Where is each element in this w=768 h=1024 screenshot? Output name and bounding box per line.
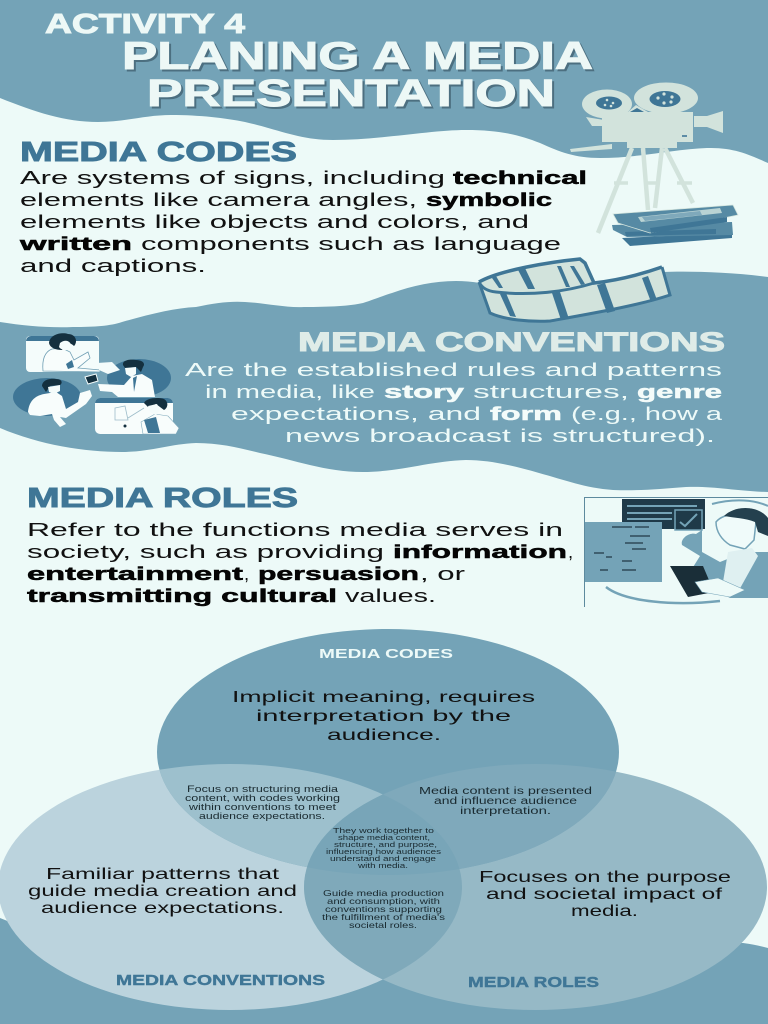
circle: media conventions xyxy=(0,764,462,1010)
text: conventions and roles overlap: conventions supporting xyxy=(325,905,443,914)
text block: media roles description: entertainment xyxy=(27,563,243,584)
section heading: media roles: MEDIA ROLES xyxy=(27,482,298,513)
circle: media codes xyxy=(157,629,619,875)
text block: media codes description: written xyxy=(18,233,132,254)
text block: media conventions description: news broadcast is structured). xyxy=(285,425,715,446)
decorative arc xyxy=(606,587,720,603)
dark checklist window xyxy=(622,499,705,530)
text: conventions and roles overlap: and consumption, with xyxy=(327,897,441,906)
text: media conventions: audience expectations. xyxy=(41,900,284,917)
text block: media conventions description: form xyxy=(490,403,562,424)
text block: media roles description xyxy=(27,519,573,606)
text: codes and conventions overlap xyxy=(185,784,340,821)
text: centre overlap: They work together to xyxy=(333,826,434,835)
text block: media codes description: elements like objects and colors, and xyxy=(20,211,529,232)
illustration: people collaborating xyxy=(13,333,179,434)
label: media roles: MEDIA ROLES xyxy=(468,974,599,991)
woman xyxy=(670,500,768,598)
text: codes and roles overlap xyxy=(419,786,592,817)
text block: media roles description: transmitting cultural xyxy=(27,585,337,606)
text: media codes xyxy=(232,689,535,744)
text: media roles: media. xyxy=(571,903,638,920)
text block: media codes description xyxy=(18,167,587,276)
section heading: media codes: MEDIA CODES xyxy=(20,136,297,167)
overlap: codes and roles xyxy=(384,764,616,868)
text: codes and roles overlap: interpretation. xyxy=(460,806,551,817)
text: codes and conventions overlap: content, with codes working xyxy=(185,793,340,803)
text block: media conventions description: story xyxy=(384,381,465,402)
text: codes and conventions overlap: audience expectations. xyxy=(199,811,325,821)
text: centre overlap: understand and engage xyxy=(330,854,436,863)
text block: media roles description: information xyxy=(393,541,567,562)
label: media codes: MEDIA CODES xyxy=(319,646,453,661)
text: centre overlap: shape media content, xyxy=(338,833,430,842)
video window top xyxy=(26,333,100,372)
text: media codes: interpretation by the xyxy=(256,708,511,725)
activity label: ACTIVITY 4 xyxy=(45,8,246,39)
text block: media conventions description: expectations, and xyxy=(231,403,481,424)
icon: film camera on tripod xyxy=(570,82,723,233)
label: media conventions: MEDIA CONVENTIONS xyxy=(116,972,325,989)
text block: media codes description: elements like camera angles, xyxy=(20,189,417,210)
text: media roles: Focuses on the purpose xyxy=(479,869,731,886)
section heading: media conventions: MEDIA CONVENTIONS xyxy=(298,327,725,357)
text: media roles: and societal impact of xyxy=(486,886,723,903)
text: centre overlap: structure, and purpose, xyxy=(334,840,437,849)
text: conventions and roles overlap: Guide media production xyxy=(323,889,445,898)
video window bottom xyxy=(95,398,179,434)
title: PRESENTATION xyxy=(147,73,555,115)
text: centre overlap xyxy=(326,826,441,870)
text block: media conventions description: structures, xyxy=(473,381,629,402)
text block: media conventions description: in media, like xyxy=(205,381,375,402)
text: media codes: audience. xyxy=(327,727,441,744)
avatar left xyxy=(13,378,92,427)
text: codes and roles overlap: Media content is presented xyxy=(419,786,592,797)
text: conventions and roles overlap xyxy=(322,889,445,930)
title xyxy=(122,35,593,115)
text: centre overlap: influencing how audiences xyxy=(326,847,441,856)
text block: media conventions description: Are the established rules and patterns xyxy=(185,359,722,380)
text: centre overlap: with media. xyxy=(357,861,408,870)
text: media conventions: Familiar patterns that xyxy=(46,866,280,883)
text: media conventions xyxy=(28,866,297,917)
overlap: conventions and roles xyxy=(304,868,462,980)
text block: media codes description: Are systems of signs, including xyxy=(20,167,445,188)
circle: media roles xyxy=(304,764,767,1010)
text block: media codes description: and captions. xyxy=(20,255,206,276)
text: media conventions: guide media creation and xyxy=(28,883,297,900)
text: media roles xyxy=(479,869,731,920)
text block: media roles description: Refer to the functions media serves in xyxy=(27,519,563,540)
text block: media conventions description xyxy=(185,359,723,446)
text: codes and roles overlap: and influence audience xyxy=(434,796,578,807)
text block: media codes description: symbolic xyxy=(426,189,552,210)
text: codes and conventions overlap: Focus on structuring media xyxy=(187,784,339,794)
blue document xyxy=(585,522,662,582)
text: codes and conventions overlap: within conventions to meet xyxy=(188,802,337,812)
text block: media codes description: components such as language xyxy=(141,233,561,254)
text: conventions and roles overlap: the fulfillment of media's xyxy=(322,913,445,922)
text block: media roles description: , xyxy=(568,541,573,562)
venn diagram xyxy=(0,629,767,1010)
text block: media codes description: technical xyxy=(453,167,587,188)
avatar right xyxy=(85,359,171,397)
icon: film strip xyxy=(479,259,670,321)
title: PLANING A MEDIA xyxy=(122,35,593,78)
text: media codes: Implicit meaning, requires xyxy=(232,689,535,706)
overlap: codes and conventions xyxy=(160,764,382,867)
icon: stacked VHS tapes xyxy=(612,205,738,246)
overlap: centre xyxy=(304,764,767,1010)
text block: media roles description: persuasion xyxy=(258,563,419,584)
text block: media roles description: society, such as providing xyxy=(27,541,384,562)
illustration: woman reviewing screens xyxy=(584,498,768,607)
text block: media roles description: , xyxy=(244,563,249,584)
text: conventions and roles overlap: societal roles. xyxy=(349,921,417,930)
text block: media conventions description: (e.g., how a xyxy=(571,403,723,424)
text block: media roles description: values. xyxy=(345,585,436,606)
text block: media conventions description: genre xyxy=(637,381,722,402)
text block: media roles description: , or xyxy=(420,563,465,584)
